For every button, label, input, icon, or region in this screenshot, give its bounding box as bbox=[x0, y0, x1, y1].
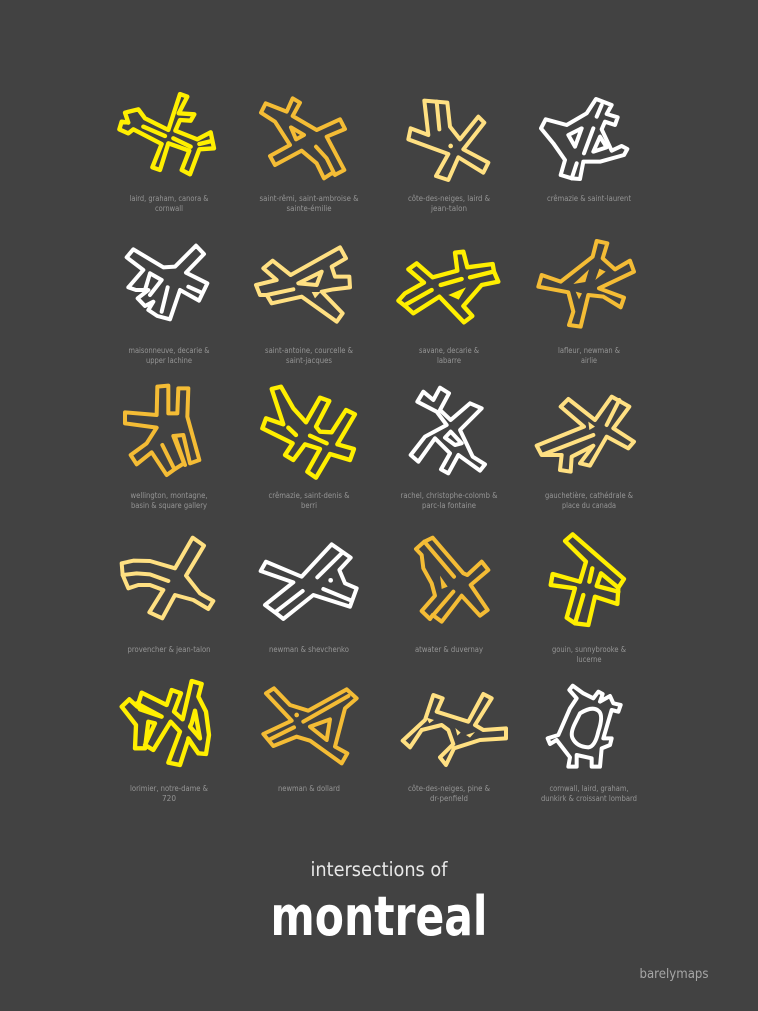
caption: labarre bbox=[437, 356, 461, 365]
panel: lorimier, notre-dame & 720 bbox=[122, 681, 209, 803]
panel: crêmazie, saint-denis & berri bbox=[262, 387, 355, 510]
icon: intersection 9 bbox=[125, 386, 199, 475]
icon: intersection 5 bbox=[127, 246, 207, 319]
caption: provencher & jean-talon bbox=[128, 645, 211, 654]
caption: basin & square gallery bbox=[131, 501, 207, 510]
caption: lucerne bbox=[576, 655, 602, 664]
panel: côte-des-neiges, laird & jean-talon bbox=[408, 101, 490, 213]
icon: intersection 3 bbox=[408, 101, 488, 180]
panel: crêmazie & saint-laurent bbox=[541, 99, 631, 203]
caption: 720 bbox=[162, 794, 176, 803]
caption: lorimier, notre-dame & bbox=[130, 784, 208, 793]
caption: berri bbox=[301, 501, 317, 510]
caption: crêmazie, saint-denis & bbox=[268, 491, 350, 500]
icon: intersection 8 bbox=[538, 241, 634, 327]
caption: crêmazie & saint-laurent bbox=[547, 194, 631, 203]
caption: laird, graham, canora & bbox=[130, 194, 209, 203]
caption: parc-la fontaine bbox=[422, 501, 476, 510]
panel: saint-antoine, courcelle & saint-jacques bbox=[256, 247, 353, 365]
icon: intersection 15 bbox=[416, 538, 488, 622]
caption: newman & shevchenko bbox=[269, 645, 349, 654]
panel: laird, graham, canora & cornwall bbox=[119, 94, 214, 213]
title: montreal bbox=[270, 885, 488, 948]
caption: dunkirk & croissant lombard bbox=[541, 794, 637, 803]
panel: lafleur, newman & airlie bbox=[538, 241, 634, 365]
panel: gauchetière, cathédrale & place du canada bbox=[537, 397, 634, 510]
icon: intersection 16 bbox=[551, 534, 624, 625]
caption: saint-jacques bbox=[286, 356, 332, 365]
caption: côte-des-neiges, pine & bbox=[408, 784, 490, 793]
credit: barelymaps bbox=[640, 966, 708, 982]
caption: cornwall bbox=[155, 204, 183, 213]
caption: rachel, christophe-colomb & bbox=[400, 491, 498, 500]
icon: intersection 10 bbox=[262, 387, 355, 478]
panel: savane, decarie & labarre bbox=[398, 252, 498, 365]
panel: provencher & jean-talon bbox=[122, 538, 213, 654]
caption: saint-rêmi, saint-ambroise & bbox=[260, 194, 359, 203]
caption: savane, decarie & bbox=[419, 346, 479, 355]
caption: gouin, sunnybrooke & bbox=[552, 645, 626, 654]
panel: atwater & duvernay bbox=[415, 538, 488, 654]
icon: intersection 7 bbox=[398, 252, 498, 322]
icon: intersection 11 bbox=[411, 388, 485, 473]
caption: jean-talon bbox=[430, 204, 467, 213]
panel: côte-des-neiges, pine & dr-penfield bbox=[403, 694, 506, 803]
icon: intersection 13 bbox=[122, 538, 213, 618]
icon: intersection 6 bbox=[256, 247, 350, 322]
panel: maisonneuve, decarie & upper lachine bbox=[127, 246, 210, 365]
icon: intersection 17 bbox=[122, 681, 209, 765]
icon: intersection 4 bbox=[541, 99, 627, 179]
panel: newman & shevchenko bbox=[261, 544, 357, 654]
caption: lafleur, newman & bbox=[558, 346, 620, 355]
icon: intersection 20 bbox=[548, 686, 621, 767]
panel: wellington, montagne, basin & square gallery bbox=[125, 386, 208, 510]
caption: gauchetière, cathédrale & bbox=[545, 491, 633, 500]
caption: cornwall, laird, graham, bbox=[550, 784, 628, 793]
panel: cornwall, laird, graham, dunkirk & croissant lombard bbox=[541, 686, 637, 803]
caption: sainte-émilie bbox=[286, 204, 332, 213]
caption: airlie bbox=[581, 356, 597, 365]
icon: intersection 18 bbox=[263, 688, 357, 763]
icon: intersection 12 bbox=[537, 397, 634, 472]
panel: newman & dollard bbox=[263, 688, 357, 793]
caption: wellington, montagne, bbox=[130, 491, 208, 500]
caption: saint-antoine, courcelle & bbox=[265, 346, 353, 355]
panel: gouin, sunnybrooke & lucerne bbox=[551, 534, 626, 664]
icon: intersection 2 bbox=[261, 98, 345, 178]
caption: place du canada bbox=[562, 501, 616, 510]
icon: intersection 14 bbox=[261, 544, 357, 619]
panel: saint-rêmi, saint-ambroise & sainte-émilie bbox=[260, 98, 359, 213]
caption: atwater & duvernay bbox=[415, 645, 483, 654]
caption: dr-penfield bbox=[430, 794, 468, 803]
subtitle: intersections of bbox=[310, 858, 449, 881]
caption: newman & dollard bbox=[278, 784, 340, 793]
caption: côte-des-neiges, laird & bbox=[408, 194, 490, 203]
icon: intersection 1 bbox=[119, 94, 214, 174]
icon: intersection 19 bbox=[403, 694, 506, 765]
caption: maisonneuve, decarie & bbox=[128, 346, 210, 355]
panel: rachel, christophe-colomb & parc-la fontaine bbox=[400, 388, 498, 510]
caption: upper lachine bbox=[146, 356, 192, 365]
